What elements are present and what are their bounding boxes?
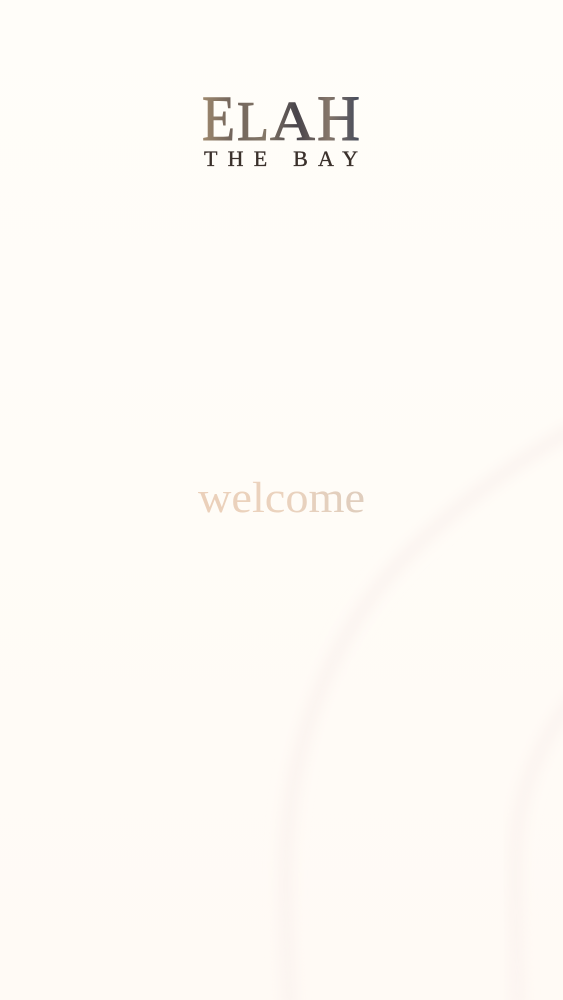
logo wordmark: Elah: L <box>237 91 269 153</box>
logo wordmark: Elah: H <box>317 83 360 155</box>
welcome heading: welcome <box>198 475 365 522</box>
small background arc <box>516 695 563 1000</box>
logo <box>202 83 360 171</box>
logo wordmark: Elah: E <box>202 83 235 155</box>
large background arc <box>286 428 563 1000</box>
logo wordmark: Elah: A <box>270 91 316 153</box>
logo subtitle: The Bay: THE BAY <box>204 146 358 171</box>
